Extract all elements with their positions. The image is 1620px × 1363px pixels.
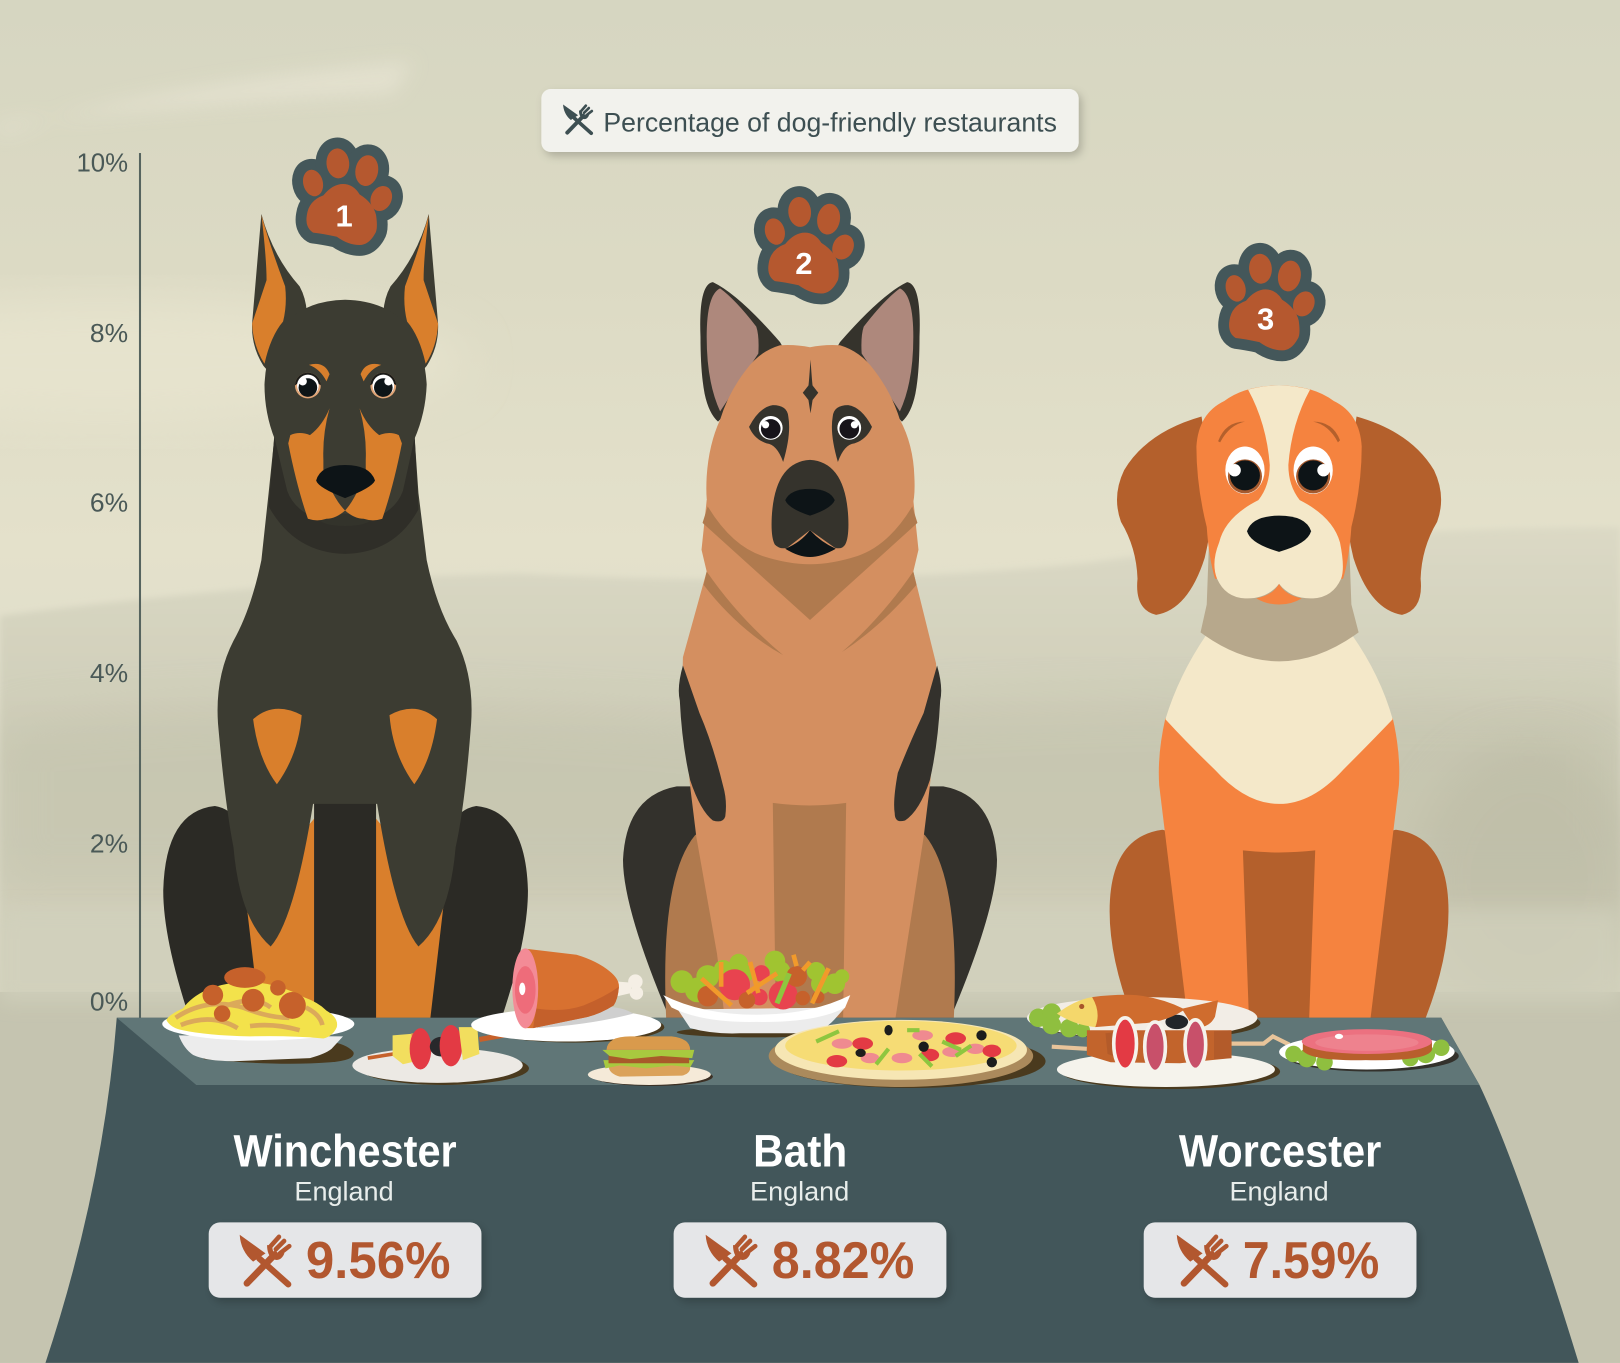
value badge: Bath 8.82% bbox=[674, 1222, 946, 1298]
food: salad bowl bbox=[663, 951, 850, 1037]
food: ham on plate bbox=[471, 948, 664, 1043]
axis labels: 10% bbox=[76, 150, 128, 178]
paw badge 1: 1 bbox=[335, 198, 353, 233]
label: Bath: Bath bbox=[753, 1126, 847, 1177]
brows bbox=[1218, 422, 1340, 442]
axis labels: 2% bbox=[90, 830, 128, 858]
value badge: Bath 8.82%: 8.82% bbox=[772, 1231, 914, 1289]
cream blaze and muzzle bbox=[1214, 385, 1343, 598]
food: pasta bowl bbox=[162, 967, 354, 1064]
legs bbox=[246, 816, 444, 1023]
paw badge 2: 2 bbox=[795, 246, 812, 281]
haunches bbox=[163, 806, 528, 1023]
value badge: Winchester 9.56% bbox=[209, 1222, 481, 1298]
label: Winchester: England bbox=[294, 1177, 394, 1207]
value badge: Worcester 7.59% bbox=[1144, 1222, 1416, 1298]
axis labels: 8% bbox=[90, 320, 128, 348]
nose bbox=[1247, 516, 1311, 552]
ears bbox=[252, 214, 438, 374]
food: steak plate bbox=[1279, 1029, 1459, 1072]
paw badge 2 bbox=[762, 196, 858, 294]
paw badge 1 bbox=[300, 147, 396, 245]
food: meat kebab plate bbox=[1052, 1018, 1289, 1089]
head bbox=[264, 300, 427, 525]
inner leg bbox=[1243, 850, 1315, 1023]
dog 1: doberman bbox=[163, 214, 528, 1023]
muzzle bbox=[772, 460, 848, 548]
paw badge 3 bbox=[1223, 253, 1319, 350]
food: burger bbox=[588, 1036, 713, 1086]
ears bbox=[700, 282, 920, 422]
label: Worcester: Worcester bbox=[1179, 1126, 1381, 1177]
head bbox=[706, 345, 915, 564]
label: Winchester: Winchester bbox=[233, 1126, 457, 1177]
food: cheese kebab plate bbox=[352, 1025, 529, 1085]
label: Bath bbox=[750, 1126, 849, 1207]
body bbox=[218, 433, 472, 947]
dog 3: beagle bbox=[1110, 385, 1448, 1023]
brows bbox=[309, 364, 381, 381]
haunches bbox=[1110, 830, 1448, 1023]
food: pizza bbox=[769, 1020, 1046, 1088]
label: Bath: England bbox=[750, 1177, 849, 1207]
nose bbox=[316, 465, 375, 498]
lettuce bbox=[671, 951, 849, 1002]
eyes bbox=[759, 416, 861, 440]
nose bbox=[785, 489, 835, 516]
head bbox=[1196, 385, 1362, 579]
dark side patches bbox=[679, 665, 941, 821]
table top bbox=[117, 1018, 1479, 1085]
axis labels: 0% bbox=[90, 989, 128, 1017]
mouth bbox=[785, 530, 836, 557]
chest patches bbox=[253, 709, 437, 784]
neck bbox=[1201, 548, 1359, 661]
body bbox=[1159, 718, 1399, 1023]
eyes bbox=[1225, 446, 1333, 494]
paw badge 3: 3 bbox=[1257, 302, 1274, 337]
chest bbox=[1165, 628, 1393, 804]
collar shadow bbox=[269, 429, 418, 554]
label: Worcester: England bbox=[1229, 1177, 1329, 1207]
chin shade bbox=[320, 514, 370, 526]
value badge: Winchester 9.56%: 9.56% bbox=[306, 1231, 450, 1289]
ears bbox=[1117, 416, 1441, 615]
dog 2: german shepherd bbox=[623, 282, 997, 1023]
eyes bbox=[295, 373, 396, 398]
neck band bbox=[703, 506, 917, 620]
label: Winchester bbox=[233, 1126, 457, 1207]
axis labels: 4% bbox=[90, 660, 128, 688]
legend: percentage of dog-friendly restaurants: Percentage of dog-friendly restaurants bbox=[603, 107, 1057, 137]
axis labels: 6% bbox=[90, 490, 128, 518]
body bbox=[682, 500, 938, 1023]
y axis bbox=[76, 150, 141, 1019]
axis labels bbox=[76, 150, 128, 1017]
forehead mark bbox=[803, 360, 818, 413]
neck strips bbox=[704, 571, 916, 655]
label: Worcester bbox=[1179, 1126, 1381, 1207]
legend: percentage of dog-friendly restaurants bbox=[541, 89, 1079, 152]
eye patches bbox=[749, 405, 872, 462]
haunches bbox=[623, 786, 997, 1023]
table bbox=[45, 1018, 1579, 1363]
food: fish plate bbox=[1027, 995, 1260, 1039]
value badge: Worcester 7.59%: 7.59% bbox=[1243, 1231, 1379, 1289]
tongue bbox=[1256, 584, 1302, 605]
inner leg bbox=[773, 803, 846, 1023]
muzzle markings bbox=[288, 408, 402, 520]
